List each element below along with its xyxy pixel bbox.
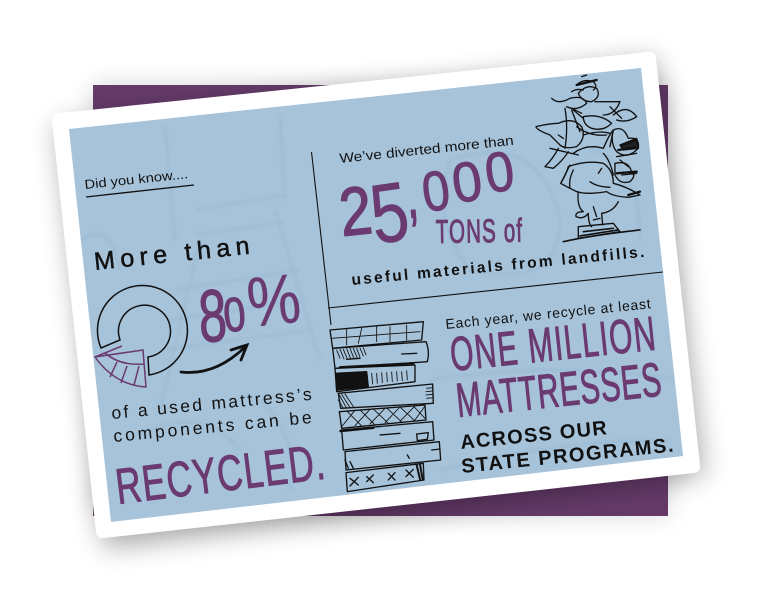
mattress 2 [333,342,428,368]
mattress 6 [341,422,434,450]
mattress 5 [339,405,426,428]
arrow to 80 percent [181,345,247,372]
value: 25,000: 0 [481,140,518,205]
text: each year we recycle at least: Each year, we recycle at least [445,295,651,332]
value: 25,000 [336,140,518,263]
value: 25,000: 0 [418,159,454,225]
text: we've diverted more than: We’ve diverted more than [339,133,514,166]
divider lines [312,152,663,325]
value: 80 percent: 0 [221,288,248,343]
value: 25,000: 2 [336,173,376,251]
mattress 8 [346,463,424,492]
left column: did you know [84,166,328,515]
ring segment: remaining 20 percent [95,346,146,387]
text: useful materials from landfills: useful materials from landfills. [351,244,645,289]
mattress 4 [338,384,433,408]
text: of a used mattress's: of a used mattress’s [110,384,313,423]
text: components can be: components can be [112,407,312,446]
purple backing panel [93,85,668,516]
label: did you know: Did you know.... [84,166,189,192]
value: 25,000: , [402,156,421,232]
illustration: stacked elephants on a scale [536,75,640,242]
bottom right: one million mattresses [330,295,674,492]
text: tons of: TONS of [435,211,523,250]
icon: ring chart with 80 percent [95,285,187,387]
value: 80 percent [197,258,304,358]
illustration: stack of mattresses [330,322,441,492]
heading: more than: More than [93,232,251,276]
mattress 7 [345,442,441,470]
value: 80 percent: 8 [197,275,229,358]
word: recycled: RECYCLED. [113,435,328,515]
text: one million: ONE MILLION [448,308,658,382]
underline [86,185,194,197]
text: across our: ACROSS OUR [459,417,608,454]
white postcard card [52,52,704,548]
top right: tons diverted [336,75,645,289]
text: mattresses: MATTRESSES [454,354,664,428]
mattress 1 [330,322,423,348]
text: state programs: STATE PROGRAMS. [460,435,674,478]
blue card panel [69,68,683,522]
value: 25,000: 5 [365,164,415,263]
value: 25,000: 0 [448,149,486,215]
mattress 3 [335,363,415,392]
value: 80 percent: % [243,258,304,342]
